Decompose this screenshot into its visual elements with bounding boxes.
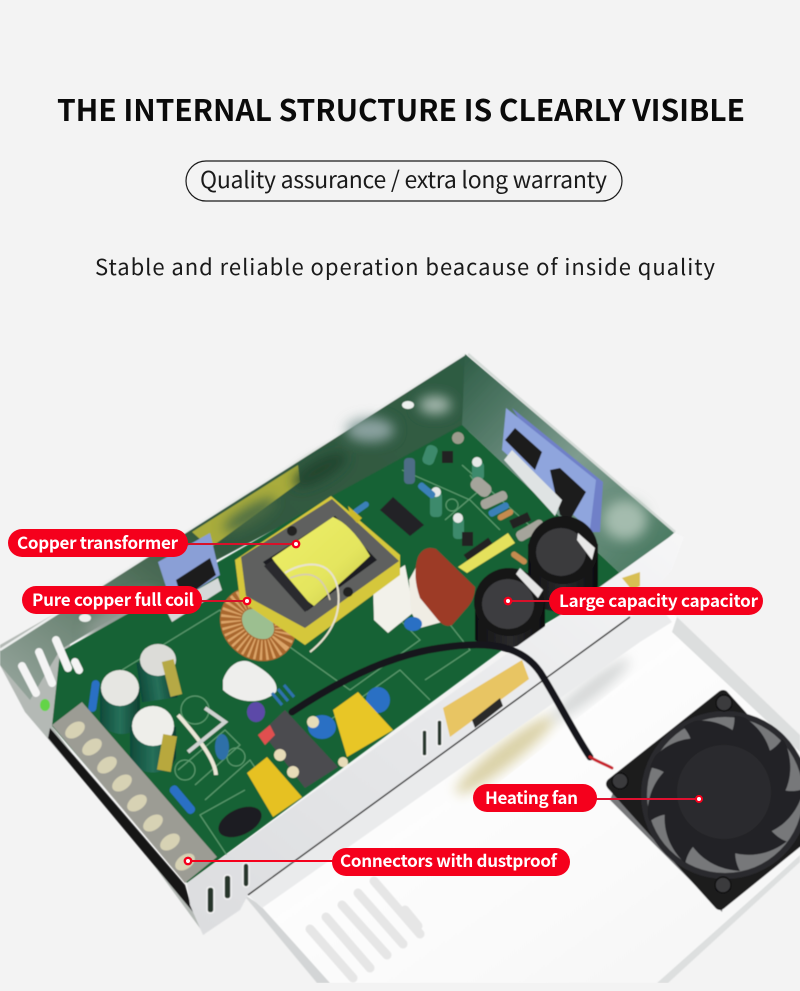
back wall left — [0, 354, 470, 700]
circuit board — [52, 425, 625, 883]
electrolytic capacitors, large black — [474, 516, 598, 647]
pale and dark reflections on back wall — [79, 396, 647, 645]
front chassis wall — [187, 533, 684, 935]
callout: pure copper full coil: Pure copper full coil — [32, 586, 194, 611]
subtitle pill: Quality assurance / extra long warranty — [200, 161, 607, 195]
white wire — [178, 715, 216, 775]
white slots at left of board — [22, 640, 79, 693]
cooling fan — [610, 695, 800, 912]
left silver end of chassis — [0, 605, 205, 935]
yellow safety capacitors — [247, 692, 393, 817]
gray connector block — [258, 710, 348, 788]
back wall left top rim — [0, 354, 465, 650]
back wall right — [462, 354, 675, 578]
red film capacitor — [409, 548, 475, 628]
white ceramic block — [373, 565, 414, 633]
callout: heating fan: Heating fan — [485, 784, 578, 809]
small green capacitors — [40, 617, 422, 844]
transformer — [235, 496, 400, 652]
fan power cable — [292, 645, 612, 768]
callout: large capacity capacitor: Large capacity capacitor — [559, 587, 759, 612]
LED — [40, 699, 50, 711]
right blue heat sink with transistors — [502, 408, 603, 532]
callout: heating fan — [473, 784, 702, 812]
warning label — [443, 660, 529, 737]
callout: connectors with dustproof — [185, 847, 570, 876]
board traces — [122, 465, 585, 860]
terminal block with dustproof cover — [48, 702, 217, 912]
rear black capacitor — [528, 516, 598, 612]
metal clip — [188, 708, 225, 752]
resistor cluster — [272, 685, 294, 705]
holes in back wall — [79, 401, 414, 622]
integrated circuit — [380, 497, 424, 536]
thermistor — [214, 800, 266, 844]
power supply product illustration — [0, 354, 800, 983]
description text: Stable and reliable operation beacause of inside quality — [95, 250, 716, 282]
bottom background band — [0, 983, 800, 991]
blue film capacitors — [88, 680, 100, 712]
callout: large capacity capacitor — [505, 587, 763, 615]
pale yellow component — [458, 533, 515, 573]
yellow reflection on back wall — [192, 465, 300, 548]
callout: copper transformer — [8, 529, 299, 557]
opened lid with slots — [242, 600, 800, 983]
white mounting glue — [223, 661, 277, 701]
copper toroid coil — [220, 587, 296, 701]
purple small capacitor — [247, 702, 265, 722]
left blue heat sink pad — [158, 533, 222, 622]
small board components — [352, 432, 546, 566]
callout: connectors with dustproof: Connectors with dustproof — [340, 847, 558, 872]
callout: pure copper full coil — [22, 586, 250, 614]
front black capacitor — [474, 568, 545, 647]
title: THE INTERNAL STRUCTURE IS CLEARLY VISIBLE — [57, 86, 745, 130]
callout: copper transformer: Copper transformer — [17, 529, 179, 554]
back wall right top rim — [468, 354, 675, 532]
